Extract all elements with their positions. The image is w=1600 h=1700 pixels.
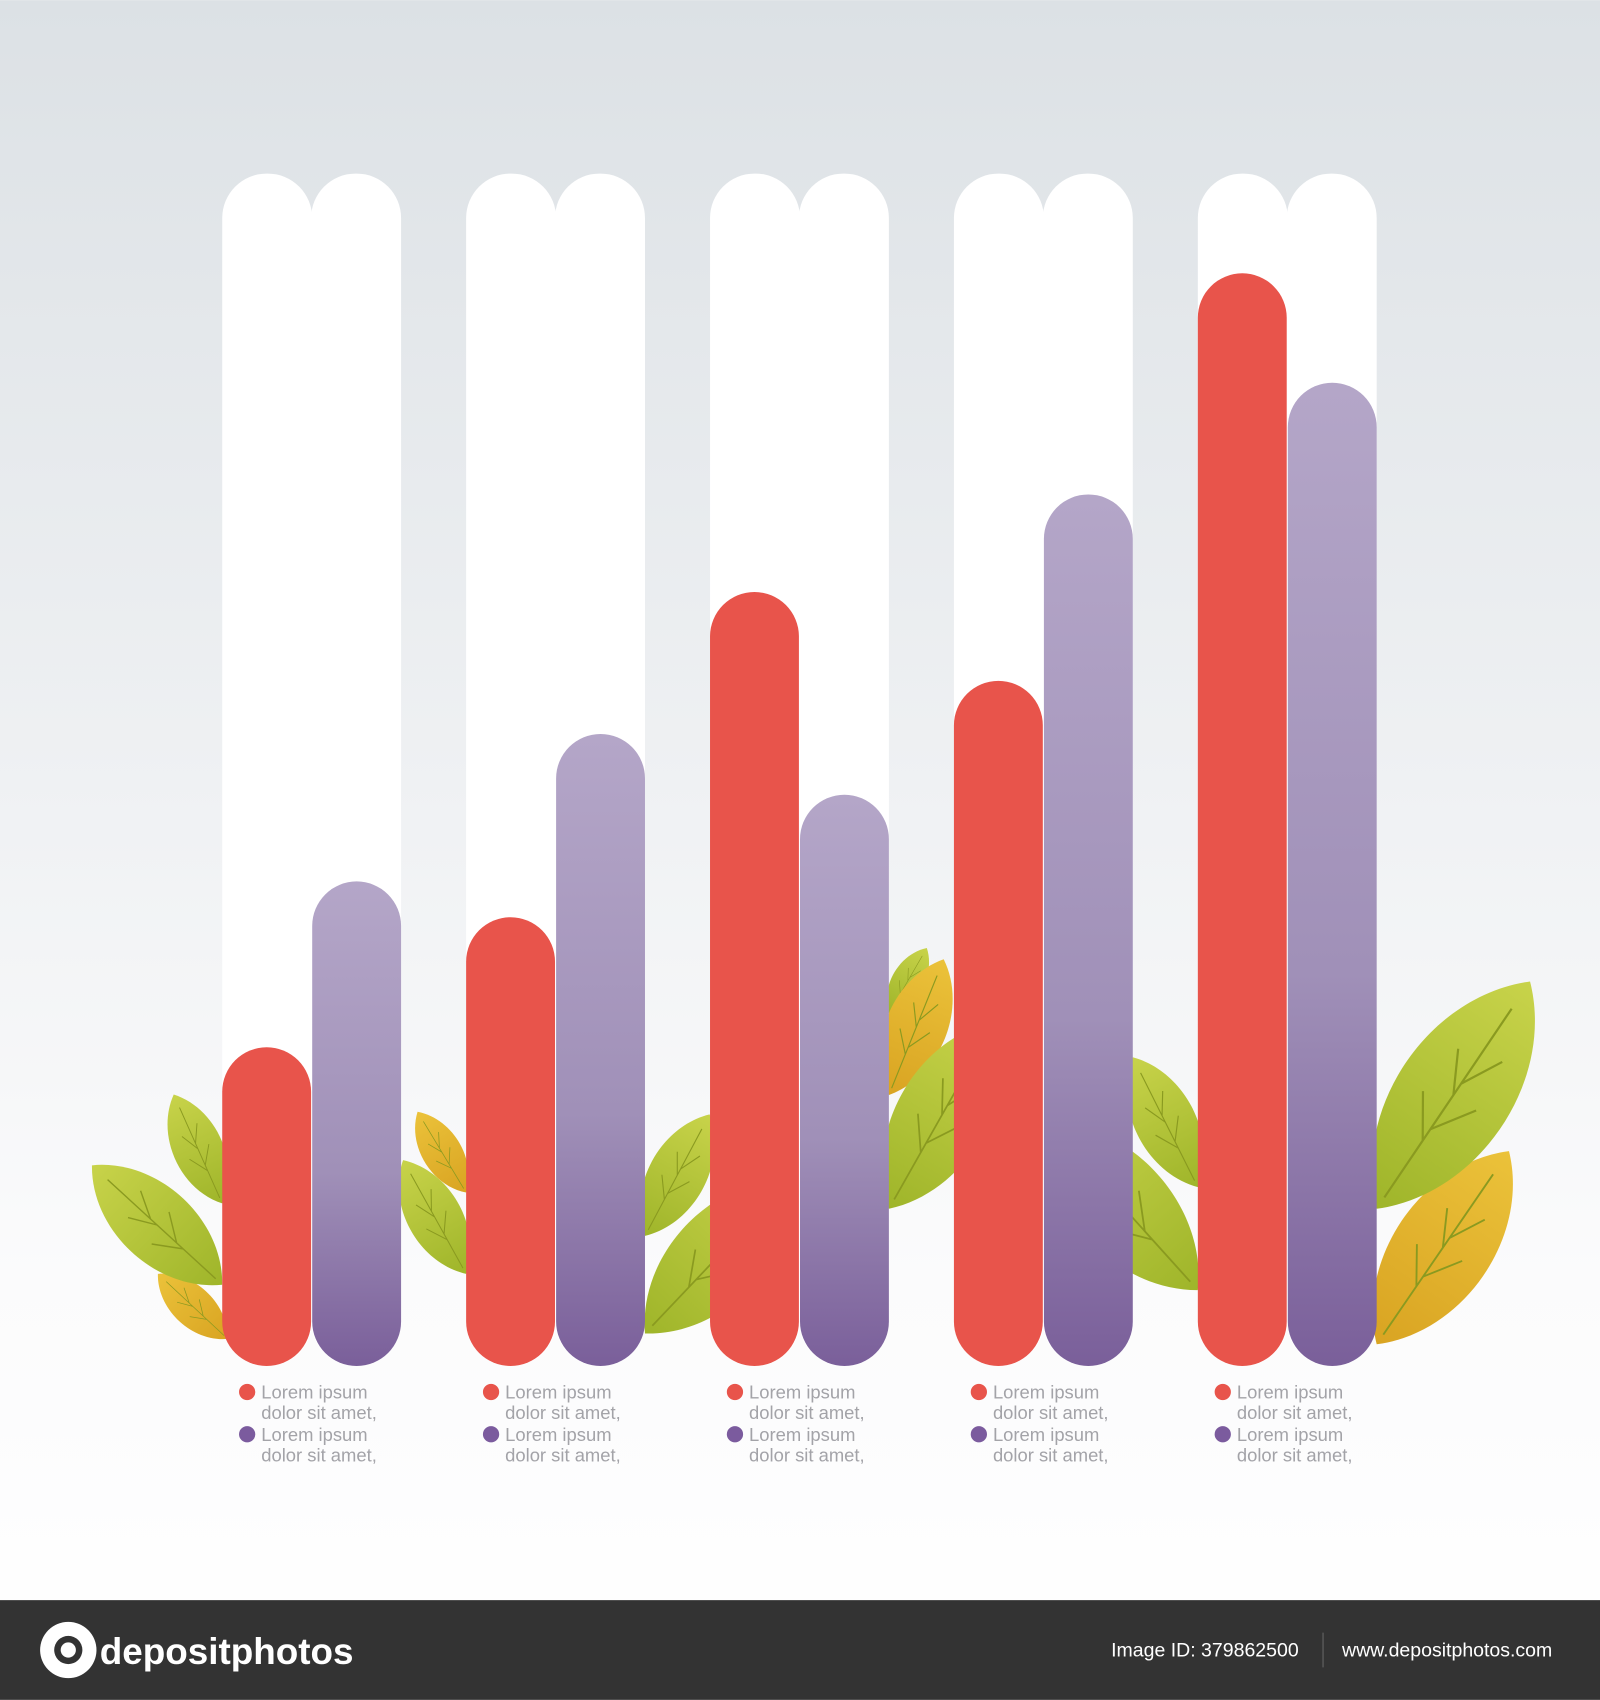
legends: dolor sit amet, — [749, 1444, 865, 1465]
leaves — [67, 940, 1578, 1372]
legends — [239, 1382, 1352, 1465]
footer: www.depositphotos.com — [1341, 1640, 1552, 1662]
legends: dolor sit amet, — [505, 1444, 621, 1465]
footer: depositphotos — [100, 1631, 354, 1672]
legends: Lorem ipsum — [505, 1424, 612, 1445]
icon: logo camera — [40, 1622, 96, 1678]
legends: dolor sit amet, — [749, 1402, 865, 1423]
legends: Lorem ipsum — [1237, 1382, 1343, 1403]
legends: dolor sit amet, — [993, 1402, 1109, 1423]
legends: Lorem ipsum — [993, 1424, 1099, 1445]
legends: Lorem ipsum — [993, 1382, 1099, 1403]
footer — [0, 1600, 1600, 1700]
legends: dolor sit amet, — [261, 1402, 377, 1423]
legends: Lorem ipsum — [749, 1382, 855, 1403]
legends: Lorem ipsum — [749, 1424, 855, 1445]
white column backgrounds — [222, 174, 1377, 1366]
legends: Lorem ipsum — [1237, 1424, 1343, 1445]
legends: dolor sit amet, — [261, 1444, 377, 1465]
legends: dolor sit amet, — [505, 1402, 621, 1423]
legends: Lorem ipsum — [505, 1382, 612, 1403]
bars red — [222, 273, 1287, 1366]
bars purple — [312, 383, 1377, 1366]
legends: dolor sit amet, — [1237, 1402, 1352, 1423]
legends: Lorem ipsum — [261, 1424, 368, 1445]
legends: dolor sit amet, — [993, 1444, 1109, 1465]
legends: dolor sit amet, — [1237, 1444, 1352, 1465]
legends: Lorem ipsum — [261, 1382, 368, 1403]
footer: Image ID: 379862500 — [1111, 1640, 1299, 1662]
